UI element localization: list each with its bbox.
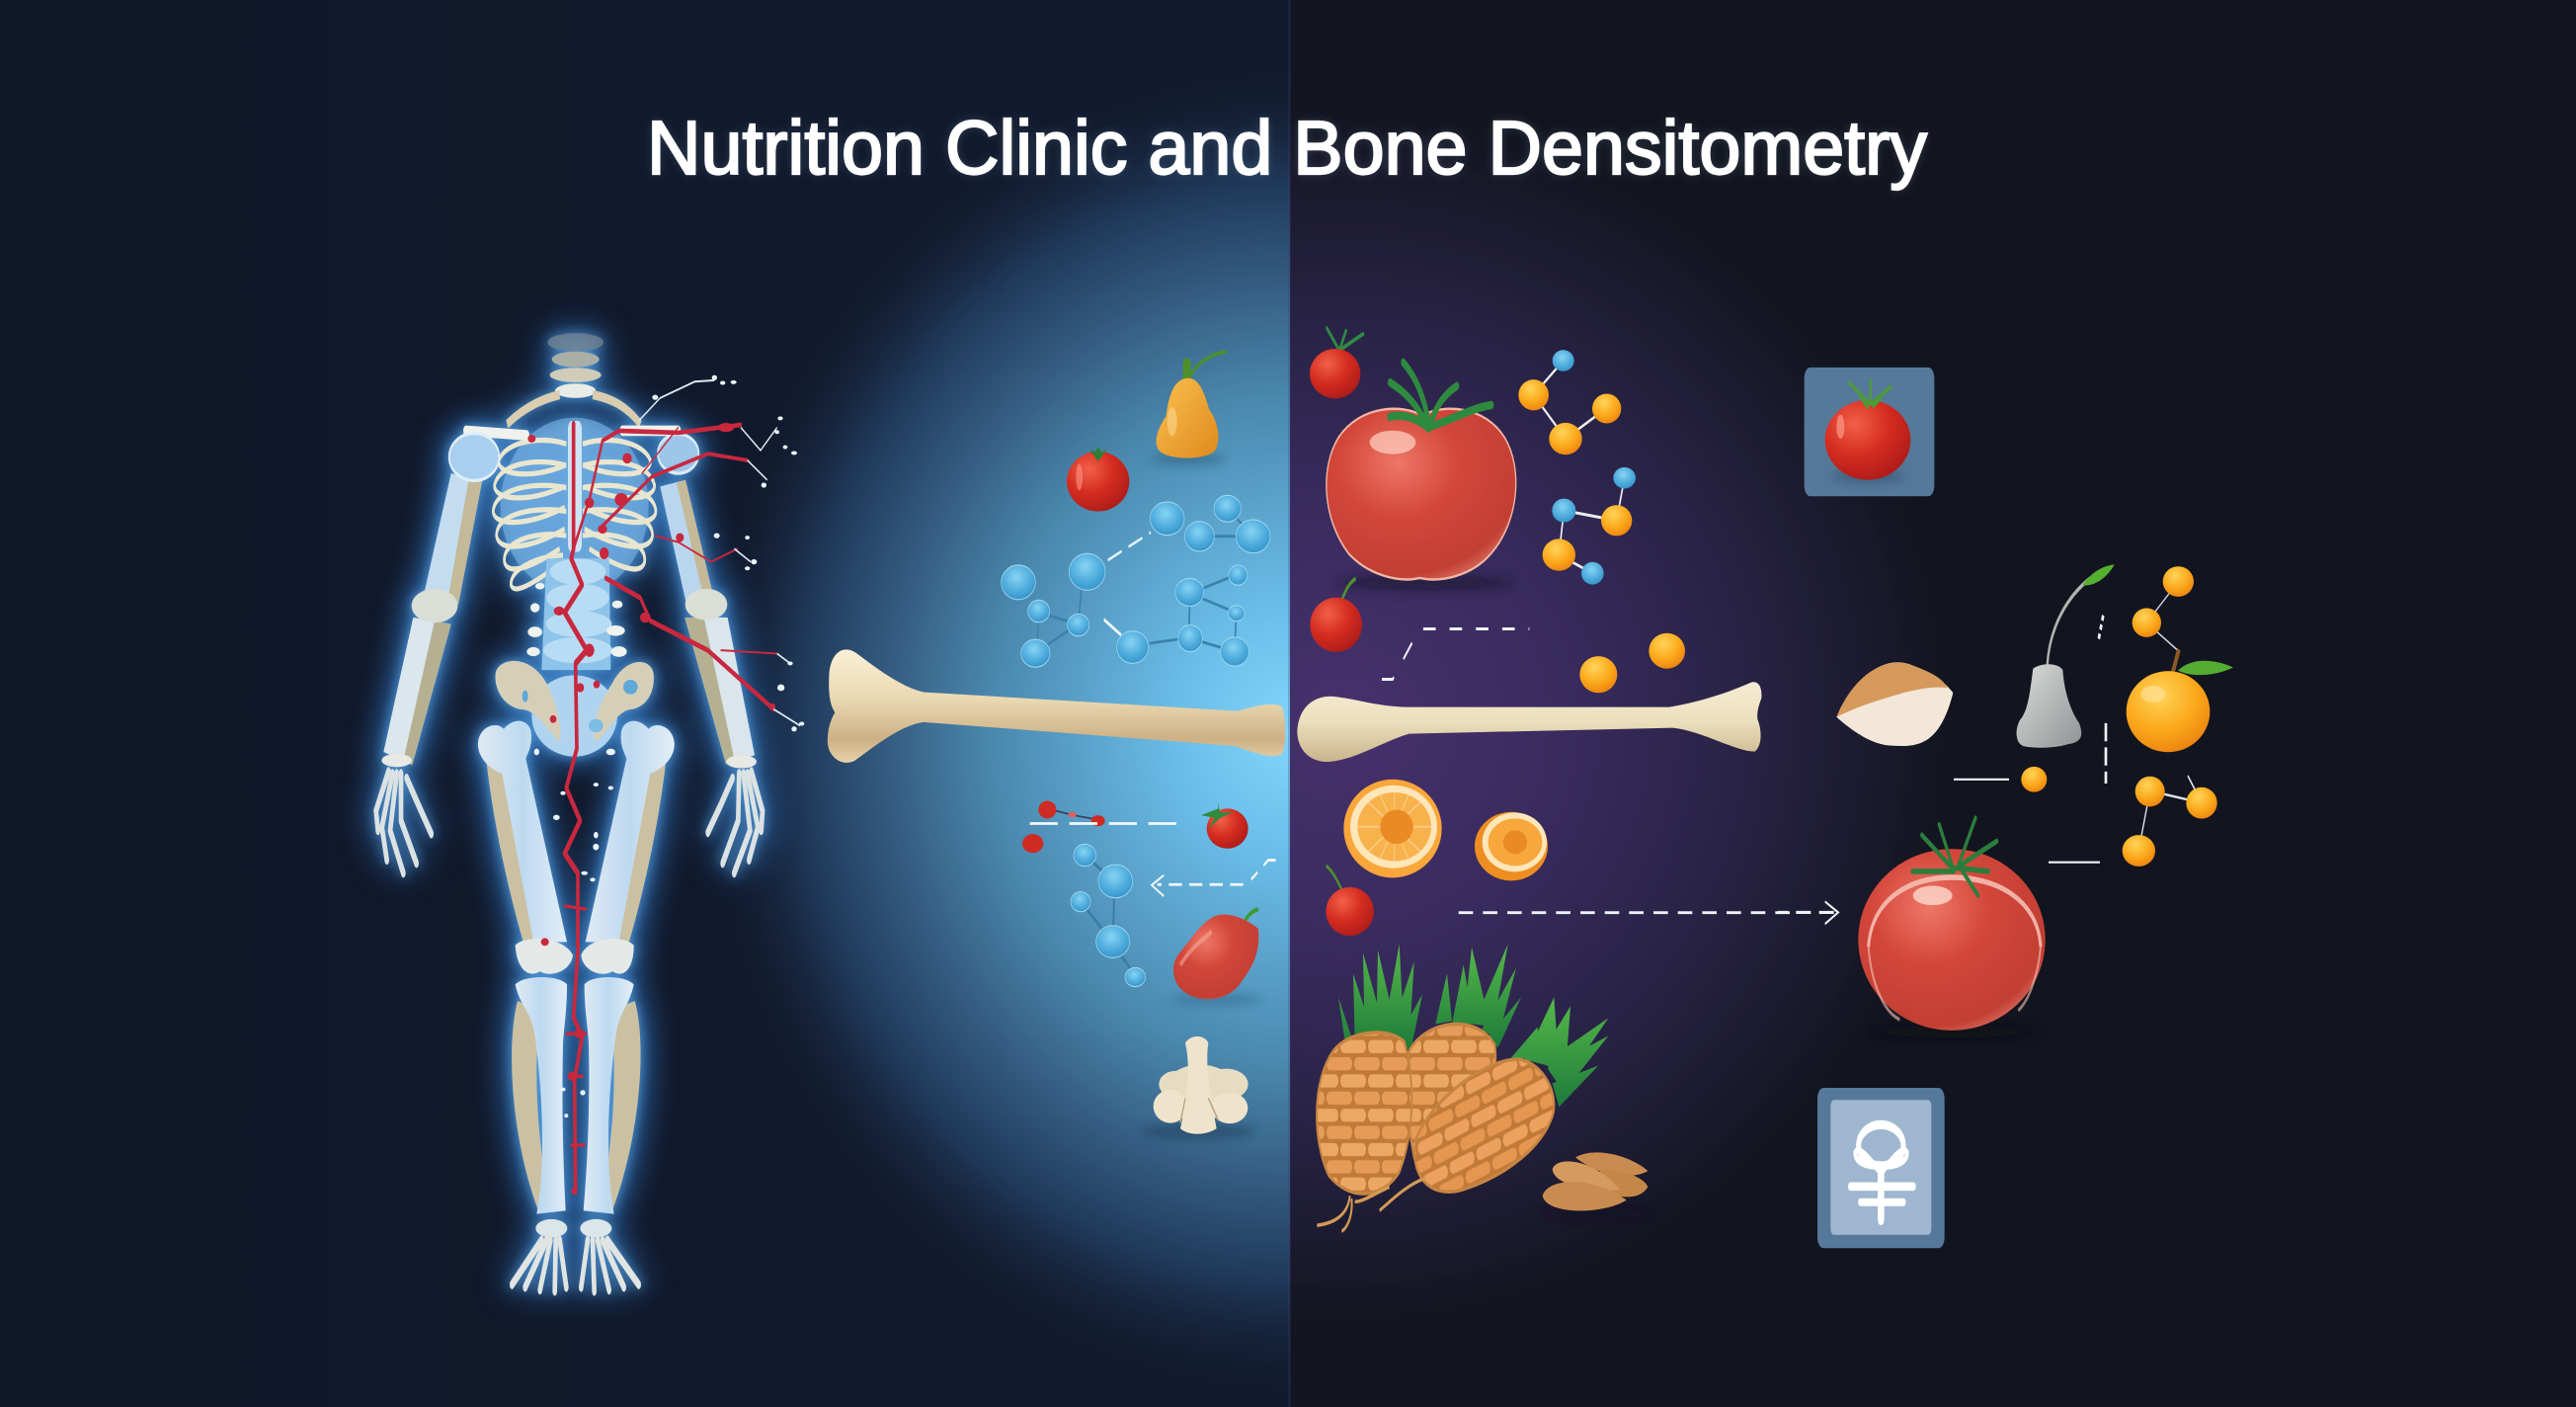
red nodes	[527, 423, 775, 1195]
molecule: orange and blue top	[1518, 350, 1621, 455]
pineapple back	[1407, 1024, 1495, 1157]
tibia left	[516, 977, 567, 1214]
icon: orange slice small	[1475, 812, 1548, 880]
title: Nutrition Clinic and Bone Densitometry	[647, 106, 1927, 191]
icon: garlic	[1141, 1036, 1256, 1139]
ankles	[535, 1219, 611, 1237]
title: Nutrition Clinic and Bone Densitometry	[647, 106, 1927, 191]
icon: large tomato	[1327, 363, 1516, 591]
elbow right	[685, 589, 727, 621]
nerve branches and white dots	[534, 375, 804, 1117]
clavicles	[507, 394, 640, 424]
molecule top	[2133, 566, 2194, 650]
dashed connector	[1382, 629, 1529, 679]
molecule: blue network	[1002, 495, 1270, 667]
foot left	[512, 1240, 566, 1291]
red dots and dashed line	[1022, 801, 1182, 853]
central artery	[565, 424, 587, 1191]
arm lower left	[383, 618, 451, 765]
icon: almonds	[1539, 1152, 1651, 1219]
center-left food and molecule group	[828, 352, 1285, 1139]
panel: right purple glow	[1290, 0, 2080, 1407]
tibia right	[584, 977, 634, 1214]
fibula right	[601, 1001, 641, 1210]
lumbar spine	[541, 558, 612, 670]
icon: small tomato top	[1310, 328, 1363, 398]
molecule: orange and blue lower	[1543, 467, 1636, 585]
card: bone density symbol	[1817, 1088, 1945, 1248]
pineapple roots	[1317, 1178, 1425, 1231]
wrist left	[381, 754, 412, 767]
icon: orange fruit	[2127, 649, 2233, 752]
femur right	[586, 721, 675, 942]
pineapple left	[1317, 1033, 1411, 1194]
humeral head left	[449, 434, 499, 480]
card: tomato	[1805, 368, 1934, 496]
arm upper right	[660, 480, 714, 605]
ribs	[493, 441, 656, 589]
icon: orange pear	[1151, 352, 1227, 464]
connector lines	[1954, 616, 2106, 863]
neck vertebrae	[547, 333, 604, 398]
arrow: dashed end and head	[1778, 901, 1838, 924]
arm lower right	[684, 618, 755, 765]
chest haze	[501, 418, 649, 595]
spine speckles	[526, 583, 627, 657]
pelvis	[495, 661, 654, 757]
icon: red tomato	[1067, 447, 1129, 512]
wrist right	[726, 755, 757, 769]
skeleton bones	[376, 333, 763, 1291]
icon: silver pear	[2017, 564, 2115, 748]
arm upper left	[423, 473, 482, 605]
fibula left	[512, 1001, 550, 1210]
icons: pineapples	[1317, 944, 1608, 1231]
femur right tan	[610, 763, 666, 946]
icon: small tomato	[1201, 802, 1248, 849]
sternum	[568, 421, 582, 552]
arteries	[527, 423, 777, 1195]
arrow: dashed left arrow	[1152, 861, 1276, 896]
bone right	[1297, 682, 1761, 762]
icon: large tomato	[1858, 818, 2046, 1037]
pineapple right	[1414, 1059, 1554, 1192]
femur left	[478, 721, 567, 942]
icon: orange slice large	[1343, 780, 1442, 877]
pineapple crowns	[1338, 944, 1608, 1107]
elbow left	[412, 589, 457, 622]
humeral head right	[658, 434, 698, 473]
foot right	[581, 1240, 639, 1291]
hand right	[708, 772, 763, 873]
knees	[516, 939, 634, 974]
orange balls	[1579, 633, 1685, 693]
femur left tan	[487, 763, 541, 946]
arrow: long dashed line	[1459, 910, 1798, 915]
bone left	[828, 649, 1285, 763]
icon: cherry	[1310, 579, 1362, 652]
orange dot	[2021, 767, 2047, 792]
molecule lower	[2123, 776, 2217, 867]
right column group	[1778, 368, 2233, 1248]
icon: red pepper	[1170, 910, 1262, 1005]
center-right food and molecule group	[1297, 328, 1798, 1231]
skeleton with arteries	[376, 333, 804, 1291]
panel: left blue glow	[0, 0, 1290, 1407]
shoulder bars	[466, 431, 679, 436]
molecule: blue chain	[1071, 844, 1146, 987]
icon: cherry lower	[1326, 866, 1374, 936]
divider	[1288, 0, 1291, 1407]
hand left	[376, 772, 432, 873]
icon: almond clove	[1836, 662, 1953, 746]
